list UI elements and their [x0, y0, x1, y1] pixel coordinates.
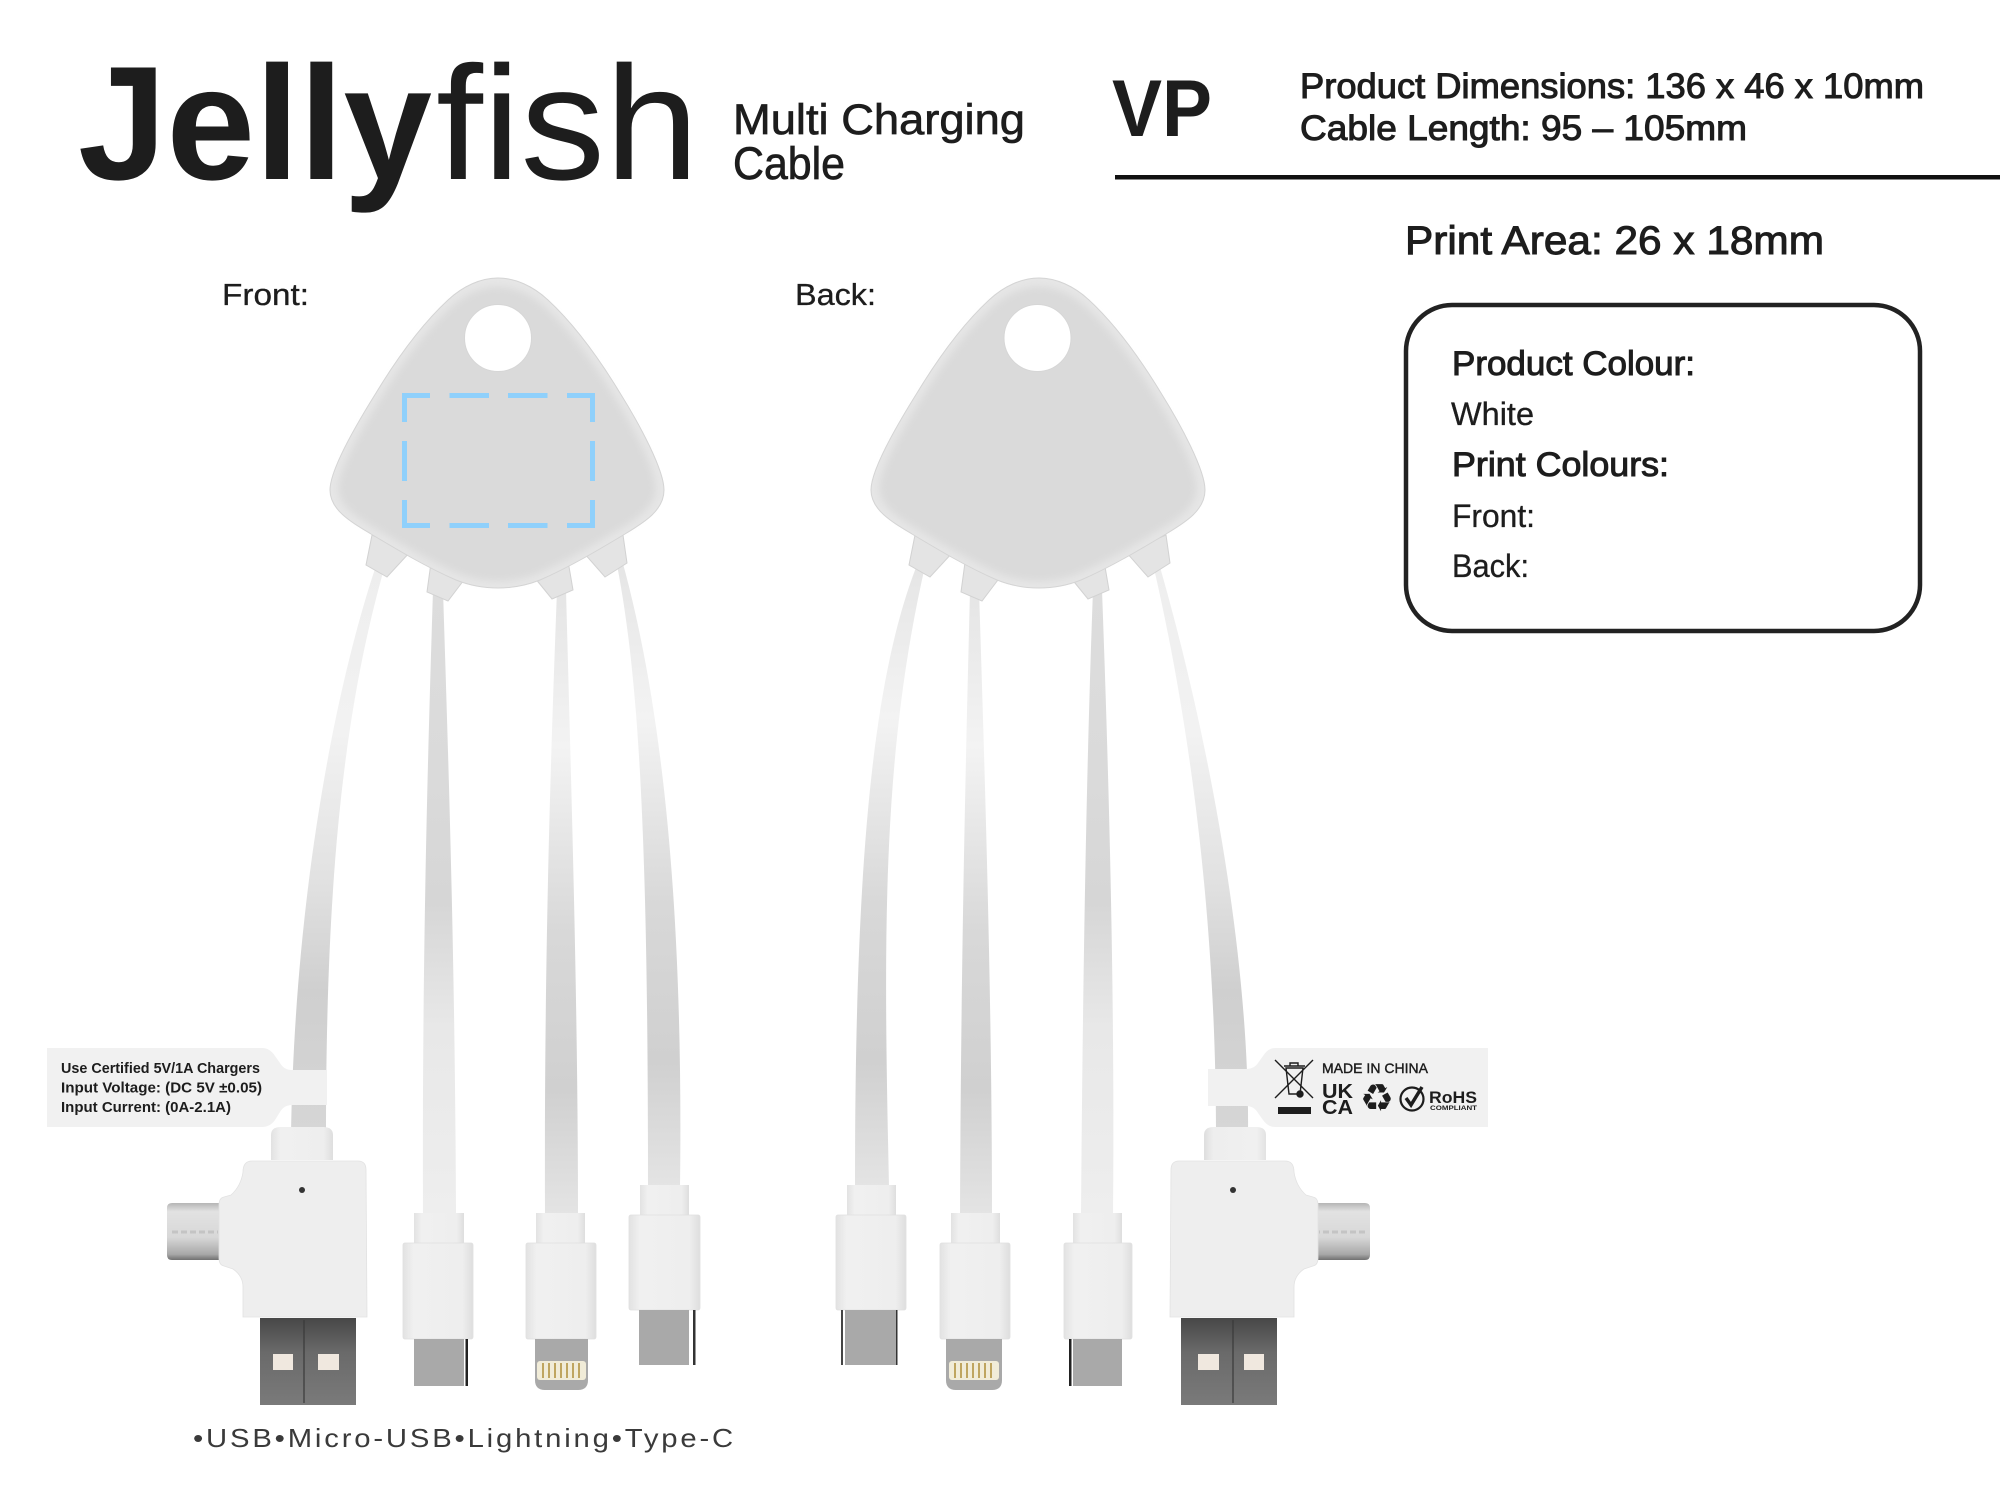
icon: UKCA mark	[1322, 1081, 1354, 1119]
front cables	[291, 560, 680, 1215]
front combined USB and type-C connector	[167, 1127, 367, 1405]
print colours heading: Print Colours:	[1452, 446, 1669, 484]
back cable tabs	[909, 535, 1170, 601]
subtitle: Multi Charging Cable	[733, 96, 1025, 189]
back cables	[855, 560, 1248, 1215]
title: Jellyfish: Jelly	[78, 33, 432, 214]
front connector: type-C	[629, 1185, 700, 1365]
print area heading: Print Area: 26 x 18mm	[1405, 219, 1824, 263]
icon: UKCA mark: CA	[1322, 1097, 1353, 1119]
front tag text: Input Voltage: (DC 5V ±0.05)	[61, 1080, 262, 1096]
title: Jellyfish	[78, 33, 699, 214]
connector types caption: •USB•Micro-USB•Lightning•Type-C	[193, 1423, 736, 1453]
subtitle: Multi Charging Cable: Multi Charging	[733, 96, 1025, 144]
product dimensions text	[1300, 67, 1924, 148]
icon: UKCA mark: UK	[1322, 1081, 1354, 1103]
back connector: type-C	[836, 1185, 906, 1365]
back print colours: Back:	[1452, 548, 1529, 584]
product dimensions text: Product Dimensions: 136 x 46 x 10mm	[1300, 67, 1924, 106]
front label: Front:	[222, 277, 309, 312]
front connector: micro-USB	[403, 1213, 473, 1386]
product dimensions text: Cable Length: 95 – 105mm	[1300, 109, 1747, 148]
back connector: lightning	[940, 1213, 1010, 1390]
icon: RoHS check	[1400, 1087, 1477, 1112]
back hub body	[871, 278, 1205, 588]
print area dashed box	[404, 396, 592, 526]
back combined USB and type-C connector	[1170, 1127, 1370, 1405]
title: Jellyfish: fish	[436, 33, 699, 214]
product colour value: White	[1451, 396, 1534, 432]
subtitle: Multi Charging Cable: Cable	[733, 138, 845, 189]
product: back view	[836, 278, 1248, 1390]
front spec tag	[47, 1048, 327, 1127]
product colour heading: Product Colour:	[1452, 345, 1695, 383]
front print colours: Front:	[1452, 498, 1535, 534]
panel: colour information	[1406, 305, 1920, 631]
icon: recycling symbol: ♻	[1360, 1076, 1394, 1120]
back compliance tag	[1208, 1048, 1488, 1127]
front cable tabs	[366, 535, 627, 601]
back connector: micro-USB	[1064, 1213, 1132, 1386]
icon: RoHS check: COMPLIANT	[1430, 1105, 1477, 1112]
front tag text: Use Certified 5V/1A Chargers	[61, 1061, 260, 1077]
made in china: MADE IN CHINA	[1322, 1060, 1429, 1076]
front tag text	[61, 1061, 262, 1116]
VP code: VP	[1112, 64, 1212, 154]
back label: Back:	[795, 277, 876, 312]
front tag text: Input Current: (0A-2.1A)	[61, 1100, 231, 1116]
icon: RoHS check: RoHS	[1429, 1088, 1477, 1107]
front hub body	[330, 278, 664, 588]
icon: crossed-out bin	[1275, 1060, 1313, 1114]
front connector: lightning	[526, 1213, 596, 1390]
product: front view	[291, 278, 700, 1390]
